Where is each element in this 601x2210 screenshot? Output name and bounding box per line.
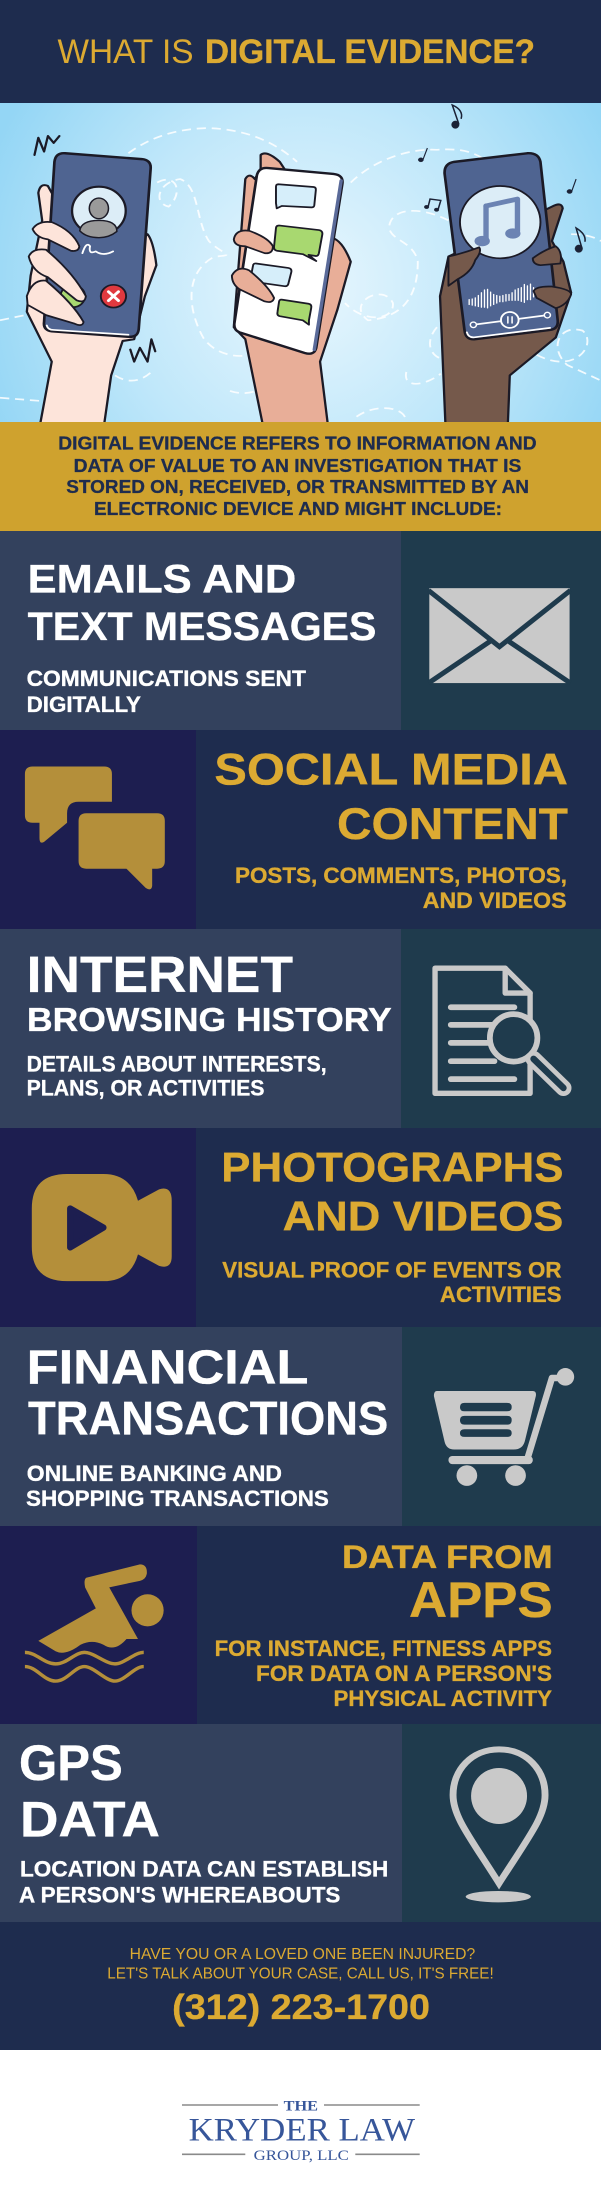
gold intro band — [0, 422, 601, 531]
heading: internet: BROWSING HISTORY — [27, 1002, 392, 1039]
panel: social media content — [0, 730, 601, 929]
logo: the kryder law group — [182, 2099, 420, 2164]
heading: financial: TRANSACTIONS — [28, 1392, 388, 1445]
icon: location pin — [453, 1749, 545, 1902]
icon: document with magnifier — [435, 968, 563, 1093]
description: gps — [19, 1857, 388, 1908]
description: apps: FOR INSTANCE, FITNESS APPS — [215, 1636, 552, 1661]
intro text: STORED ON, RECEIVED, OR TRANSMITTED BY AN — [66, 477, 529, 497]
description: apps — [215, 1636, 552, 1711]
heading: social media: SOCIAL MEDIA — [214, 746, 568, 794]
footer call to action — [0, 1922, 601, 2050]
description: photographs: ACTIVITIES — [440, 1282, 562, 1307]
description: social media: POSTS, COMMENTS, PHOTOS, — [235, 863, 567, 888]
intro text — [58, 433, 537, 519]
heading: gps: GPS — [19, 1735, 123, 1791]
heading: emails: TEXT MESSAGES — [28, 605, 376, 649]
heading: apps: APPS — [409, 1572, 553, 1628]
heading: photographs: AND VIDEOS — [283, 1192, 563, 1239]
icon: envelope — [429, 588, 570, 683]
intro text: ELECTRONIC DEVICE AND MIGHT INCLUDE: — [94, 499, 502, 519]
description: emails: DIGITALLY — [27, 692, 141, 717]
description: financial — [26, 1461, 329, 1511]
header panel — [0, 0, 601, 103]
hand and phone: text messages — [232, 153, 351, 424]
heading: photographs: PHOTOGRAPHS — [221, 1144, 563, 1191]
hand and phone: incoming call — [27, 136, 156, 424]
description: photographs: VISUAL PROOF OF EVENTS OR — [222, 1257, 562, 1282]
hand and phone: music player — [440, 153, 571, 424]
intro text: DATA OF VALUE TO AN INVESTIGATION THAT IS — [74, 456, 521, 476]
logo: the kryder law group: THE — [284, 2099, 318, 2115]
heading: apps: DATA FROM — [342, 1539, 553, 1575]
heading: social media: CONTENT — [337, 800, 568, 849]
description: financial: SHOPPING TRANSACTIONS — [26, 1486, 329, 1511]
heading: gps: DATA — [20, 1792, 160, 1848]
heading: emails — [28, 557, 376, 649]
description: financial: ONLINE BANKING AND — [27, 1461, 282, 1486]
panel: data from apps — [0, 1526, 601, 1724]
description: social media — [235, 863, 567, 913]
description: photographs — [222, 1257, 562, 1307]
description: apps: PHYSICAL ACTIVITY — [334, 1686, 552, 1711]
music notes — [418, 105, 585, 252]
call to action text — [107, 1946, 494, 1982]
dashed background curves — [0, 128, 601, 422]
heading: apps — [342, 1539, 553, 1628]
icon: swimmer — [25, 1564, 164, 1681]
panel: internet browsing history — [0, 929, 601, 1128]
heading: financial — [27, 1341, 388, 1445]
description: gps: A PERSON'S WHEREABOUTS — [19, 1883, 340, 1908]
description: emails: COMMUNICATIONS SENT — [27, 666, 306, 691]
description: emails — [27, 666, 306, 717]
heading: internet: INTERNET — [27, 946, 293, 1003]
description: internet: PLANS, OR ACTIVITIES — [27, 1076, 264, 1101]
title: DIGITAL EVIDENCE? — [205, 33, 535, 71]
call to action text: HAVE YOU OR A LOVED ONE BEEN INJURED? — [130, 1946, 476, 1963]
description: social media: AND VIDEOS — [423, 888, 566, 913]
description: apps: FOR DATA ON A PERSON'S — [256, 1661, 552, 1686]
icon: video camera — [32, 1174, 172, 1281]
title: WHAT IS — [58, 33, 194, 71]
heading: social media — [214, 746, 568, 849]
call to action text: LET'S TALK ABOUT YOUR CASE, CALL US, IT'S FREE! — [107, 1965, 494, 1982]
heading: photographs — [221, 1144, 563, 1239]
panel: photographs and videos — [0, 1128, 601, 1327]
hero illustration: three hands holding phones — [0, 103, 601, 424]
panel: financial transactions — [0, 1327, 601, 1526]
heading: financial: FINANCIAL — [27, 1341, 308, 1395]
description: internet — [27, 1052, 327, 1101]
description: internet: DETAILS ABOUT INTERESTS, — [27, 1052, 327, 1076]
heading: internet — [27, 946, 392, 1039]
title — [58, 33, 535, 71]
heading: gps — [19, 1735, 160, 1848]
description: gps: LOCATION DATA CAN ESTABLISH — [20, 1857, 388, 1882]
icon: shopping cart — [434, 1368, 574, 1486]
phone number: (312) 223-1700 — [172, 1988, 430, 2027]
logo: the kryder law group: KRYDER LAW — [189, 2113, 416, 2149]
panel: gps data — [0, 1724, 601, 1922]
icon: chat bubbles — [25, 767, 165, 889]
panel: emails and text messages — [0, 531, 601, 730]
logo: the kryder law group: GROUP, LLC — [254, 2148, 349, 2164]
heading: emails: EMAILS AND — [28, 557, 296, 601]
intro text: DIGITAL EVIDENCE REFERS TO INFORMATION AND — [58, 433, 537, 453]
